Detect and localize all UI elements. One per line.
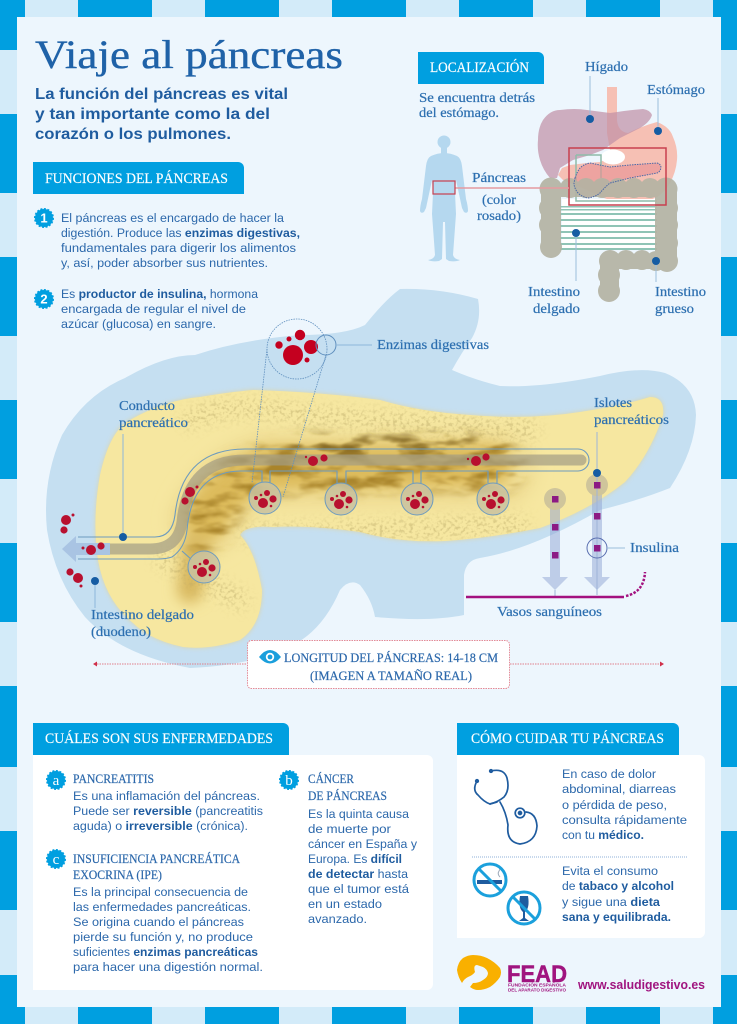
duodenum loop lines (576, 155, 657, 201)
website: www.saludigestivo.es (577, 977, 705, 992)
care text 2: sana y equilibrada. (562, 910, 671, 924)
logo: FEAD (457, 955, 567, 992)
anatomy labels: Páncreas (472, 170, 526, 185)
icon: stethoscope (475, 770, 537, 844)
disease c (47, 850, 263, 974)
panel: enfermedades (33, 723, 433, 990)
heading: funciones del páncreas: FUNCIONES DEL PÁNCREAS (45, 170, 228, 187)
organ: small pancreas (574, 163, 661, 198)
logo mark (457, 955, 501, 990)
logo: FEAD: FEAD (507, 961, 567, 988)
care text 1 (562, 767, 687, 842)
pancreas dotted outline (574, 163, 661, 198)
diagram: acini circles (188, 482, 509, 583)
care text 2: y sigue una dieta (562, 895, 660, 909)
anatomy labels: Intestino (528, 284, 580, 299)
function 1: digestión. Produce las enzimas digestivas, (61, 226, 300, 240)
anatomy labels: rosado) (477, 208, 521, 223)
disease c: INSUFICIENCIA PANCREÁTICA (73, 851, 241, 866)
icon: no alcohol (508, 892, 540, 924)
care text 1: consulta rápidamente (562, 813, 687, 827)
red frame (569, 148, 666, 205)
care text 2: Evita el consumo (562, 864, 658, 878)
panel: cuidados (457, 723, 705, 938)
connector line (455, 187, 569, 189)
disease c: EXOCRINA (IPE) (73, 867, 162, 882)
disease b: avanzado. (308, 912, 367, 926)
care text 2: de tabaco y alcohol (562, 879, 674, 893)
label: conducto pancreático (119, 398, 188, 541)
function 1 (35, 209, 300, 270)
diagram: insulin arrows: Insulina (630, 540, 679, 555)
function 1: fundamentales para digerir los alimentos (61, 241, 296, 255)
anatomy labels: grueso (655, 301, 694, 316)
localización text (419, 90, 535, 120)
disease b: Es la quinta causa (308, 807, 409, 821)
disease a: Es una inflamación del páncreas. (73, 789, 260, 803)
diagram: blood vessel (466, 572, 645, 619)
disease a: PANCREATITIS (73, 771, 154, 786)
length measure: (IMAGEN A TAMAÑO REAL) (310, 668, 472, 683)
organ: large intestine (539, 178, 678, 302)
label: intestino delgado: Intestino delgado (91, 607, 194, 622)
function 2: 2 (40, 292, 48, 306)
anatomy labels (472, 59, 706, 316)
heading: localización: LOCALIZACIÓN (430, 59, 529, 76)
disease a: Puede ser reversible (pancreatitis (73, 804, 263, 818)
anatomy: digestive organs (433, 87, 678, 302)
subtitle: corazón o los pulmones. (35, 126, 231, 143)
localización text: Se encuentra detrás (419, 90, 535, 105)
label: intestino delgado (91, 577, 194, 639)
subtitle: La función del páncreas es vital (35, 86, 288, 103)
diagram: pancreas body (95, 390, 663, 648)
heading: enfermedades: CUÁLES SON SUS ENFERMEDADES (45, 730, 273, 747)
diagram: left arrow (62, 536, 110, 562)
function 2: encargada de regular el nivel de (61, 302, 246, 316)
care text 1: con tu médico. (562, 828, 644, 842)
length measure: LONGITUD DEL PÁNCREAS: 14-18 CM (284, 650, 498, 665)
disease b: DE PÁNCREAS (308, 788, 387, 803)
care text 2 (562, 864, 674, 924)
diagram: magnified enzymes (252, 319, 489, 497)
disease b: de muerte por (308, 822, 391, 836)
diagram: insulin arrows (542, 395, 679, 597)
localización text: del estómago. (419, 105, 499, 120)
icon: no smoking (474, 864, 506, 896)
diagram: magnified enzymes: Enzimas digestivas (377, 337, 489, 352)
care text 1: En caso de dolor (562, 767, 656, 781)
anatomy labels: (color (482, 192, 517, 207)
disease b: cáncer en España y (308, 837, 418, 851)
disease a: a (53, 773, 60, 789)
disease b: en un estado (308, 897, 382, 911)
function 1: El páncreas es el encargado de hacer la (61, 211, 284, 225)
disease c: c (53, 852, 60, 868)
function 2 (35, 287, 258, 331)
disease c: las enfermedades pancreáticas. (73, 900, 251, 914)
disease b: b (285, 773, 293, 789)
label: conducto pancreático: Conducto (119, 398, 175, 413)
anatomy labels: Hígado (585, 59, 628, 74)
organ: liver (538, 109, 652, 178)
diagram: pancreas background (blue) (46, 289, 696, 668)
subtitle: y tan importante como la del (35, 106, 270, 123)
function 1: 1 (40, 210, 48, 226)
care text 1: o pérdida de peso, (562, 798, 667, 812)
label: intestino delgado: (duodeno) (91, 624, 151, 639)
diagram: insulin arrows: pancreáticos (594, 412, 669, 427)
subtitle (35, 86, 288, 143)
organ: stomach (558, 87, 677, 203)
body marker (433, 181, 455, 194)
anatomy labels: Estómago (647, 82, 705, 97)
disease b: de detectar hasta (308, 867, 408, 881)
disease b (280, 771, 418, 926)
function 2: Es productor de insulina, hormona (61, 287, 258, 301)
disease a: aguda) o irreversible (crónica). (73, 819, 248, 833)
disease c: para hacer una digestión normal. (73, 960, 263, 974)
anatomy labels: delgado (533, 301, 580, 316)
organ: small intestine (560, 199, 657, 250)
title: Viaje al páncreas (35, 32, 343, 77)
function 1: y, así, poder absorber sus nutrientes. (61, 256, 268, 270)
heading: cuidados: CÓMO CUIDAR TU PÁNCREAS (471, 730, 664, 747)
length measure (93, 640, 664, 688)
heading: cuidados (457, 723, 679, 755)
disease c: Es la principal consecuencia de (73, 885, 248, 899)
logo: FEAD: DEL APARATO DIGESTIVO (508, 988, 566, 992)
disease c: Se origina cuando el páncreas (73, 915, 244, 929)
heading: localización (418, 52, 544, 84)
disease a (47, 771, 263, 833)
label: conducto pancreático: pancreático (119, 415, 188, 430)
icon: human body (420, 136, 468, 261)
pancreas tissue texture (165, 409, 530, 600)
anatomy labels: Intestino (655, 284, 706, 299)
disease b: CÁNCER (308, 771, 354, 786)
diagram: pancreatic duct (78, 449, 589, 560)
organ: white hole (601, 150, 625, 164)
logo: FEAD: FUNDACIÓN ESPAÑOLA (508, 980, 567, 988)
disease b: que el tumor está (308, 882, 409, 896)
diagram: enzyme particles (60, 453, 490, 588)
disease c: suficientes enzimas pancreáticas (73, 945, 258, 959)
function 2: azúcar (glucosa) en sangre. (61, 317, 216, 331)
heading: funciones del páncreas (33, 162, 244, 194)
icon: eye (259, 650, 281, 664)
disease c: pierde su función y, no produce (73, 930, 253, 944)
diagram: blood vessel: Vasos sanguíneos (497, 604, 602, 619)
diagram: insulin arrows: Islotes (594, 395, 632, 410)
care text 1: abdominal, diarreas (562, 782, 676, 796)
heading: enfermedades (33, 723, 289, 755)
disease b: Europa. Es difícil (308, 852, 402, 866)
